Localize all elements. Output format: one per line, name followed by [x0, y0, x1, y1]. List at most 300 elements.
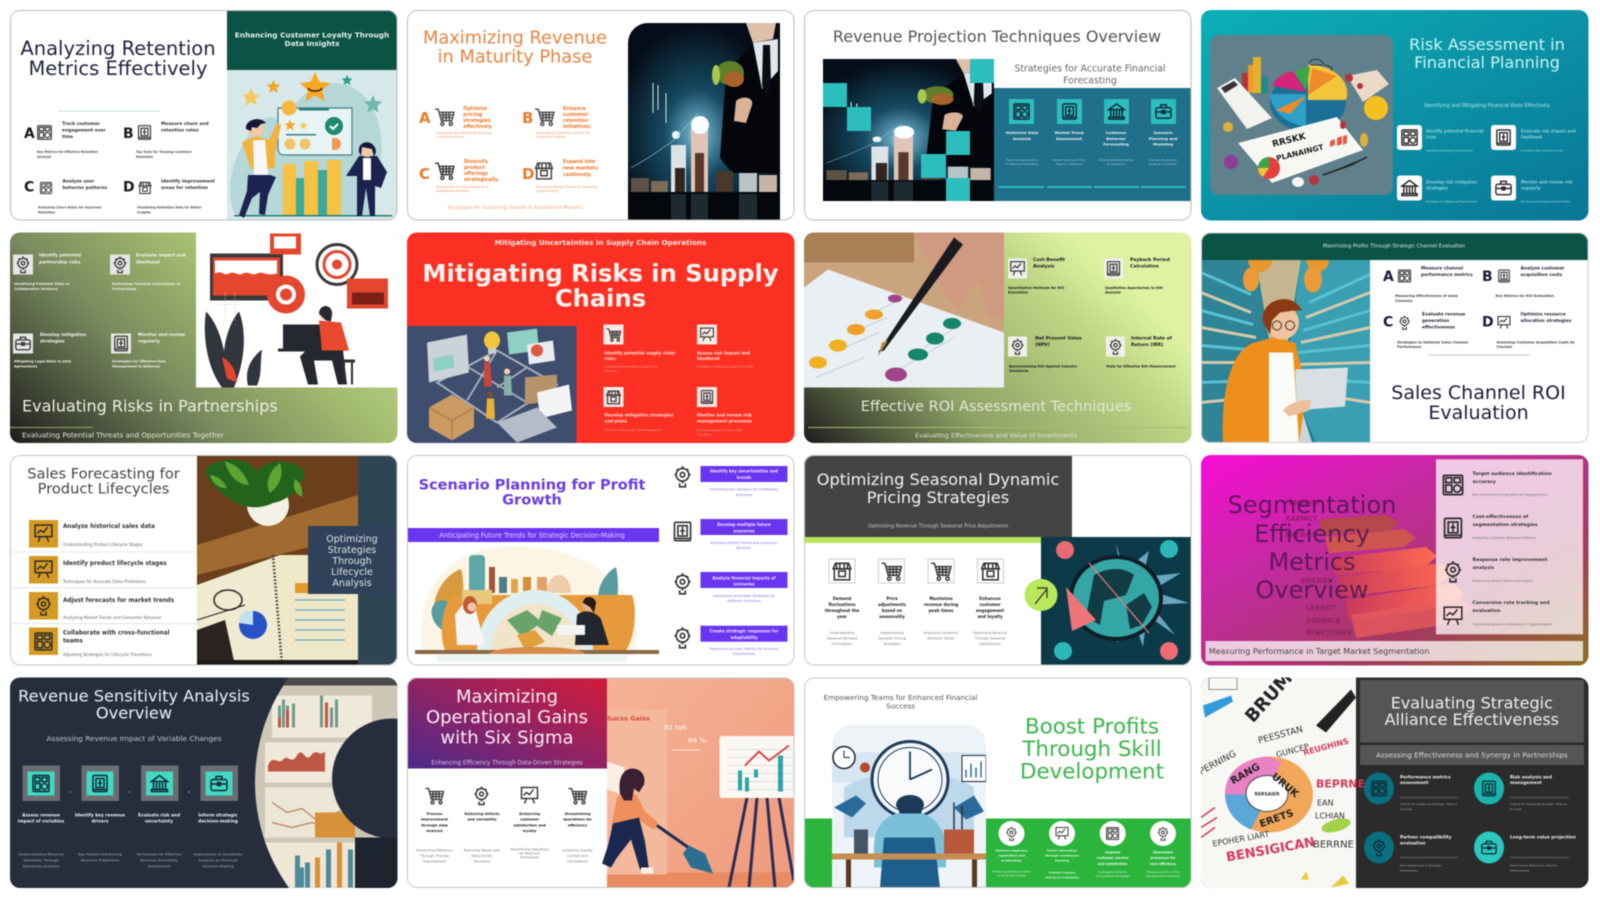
- column 2: [878, 559, 907, 646]
- item 2: Payback Period: [1130, 257, 1170, 263]
- item 1: Identifying Potential Risks in: [14, 282, 70, 286]
- step 4: adaptability: [730, 635, 758, 640]
- slide: Maximizing Operational Gains with Six Sigma: [407, 678, 796, 888]
- title: Revenue Projection Techniques Overview: [833, 27, 1161, 46]
- item A: Optimize: [463, 106, 488, 112]
- step 4: Create strategic responses for: [710, 629, 778, 634]
- subtitle band: Anticipating Future Trends for Strategic Decision-Making: [439, 532, 625, 540]
- column 1: for Revenue Forecasting: [1006, 162, 1039, 166]
- metric 3: Measuring Market Reach and Impact: [1472, 579, 1534, 583]
- item 2: Strategies for Mitigating Supply Chain Risks: [697, 364, 755, 368]
- column 2: Impact on Revenue: [1056, 162, 1082, 166]
- step 3: [674, 572, 788, 603]
- item 2: Assess risk impact and: [697, 350, 750, 356]
- overlay panel: Analysis: [332, 578, 372, 589]
- item 4: [1491, 176, 1573, 204]
- item C: Performance: [1397, 345, 1422, 349]
- column 4: Planning and: [1149, 136, 1178, 141]
- item 4: [1106, 336, 1176, 368]
- item A: Analysis: [37, 155, 52, 159]
- item A: Key Metrics for Effective Retention: [37, 150, 98, 154]
- title: Metrics Effectively: [28, 57, 208, 80]
- metric 3: Response rate improvement: [1472, 557, 1548, 563]
- column 2: Foster innovation: [1047, 848, 1077, 852]
- illustration: man with laptop in aisle: [1201, 260, 1370, 443]
- item A: Channels: [1395, 299, 1412, 303]
- illustration: hand-drawn mind map: ERETS: [1258, 808, 1295, 830]
- column 4: Achieving Quality: [562, 848, 593, 852]
- item A: [24, 121, 106, 159]
- item C: Established Markets: [436, 189, 469, 193]
- item B: B: [522, 109, 533, 127]
- step 2: Behavior: [736, 546, 752, 550]
- illustration: analysts around a dial: [415, 547, 659, 662]
- item A: performance metrics: [1421, 272, 1473, 278]
- illustration: woman pushing a spade: 01 tak: [664, 724, 688, 732]
- column 4: [1141, 99, 1186, 188]
- illustration: isometric supply chain: [407, 326, 576, 443]
- column 1: Fluctuations: [832, 642, 853, 646]
- step 2: Key Factors Influencing: [78, 852, 123, 856]
- title: Effective ROI Assessment Techniques: [861, 399, 1131, 415]
- item A: strategies: [463, 118, 491, 124]
- row 1: Understanding Product Lifecycle Stages: [63, 542, 143, 547]
- step 2: Identify key revenue: [75, 812, 125, 818]
- step 3: scenarios: [733, 582, 755, 587]
- item 4: Strategies for Effective Risk: [112, 360, 166, 364]
- column 2: Dynamic Pricing: [878, 636, 906, 640]
- column 3: loyalty: [523, 829, 537, 833]
- item D: D: [123, 180, 135, 196]
- row 3: Adjust forecasts for market trends: [63, 598, 175, 604]
- step 4: Measuring Success: Metrics for Scenario: [710, 647, 778, 651]
- column 1: Analysis: [1013, 136, 1032, 141]
- column 4: [973, 559, 1007, 646]
- item D: Optimize resource: [1520, 312, 1566, 318]
- illustration: hand-drawn mind map: BEPRNE: [1316, 778, 1365, 790]
- step 4: Inform strategic: [198, 812, 238, 818]
- item A: in Maturity Phase: [436, 135, 465, 139]
- item 3: Develop mitigation: [40, 332, 86, 338]
- item 2: likelihood: [697, 356, 720, 361]
- header panel: [227, 10, 398, 70]
- subtitle panel: Assessing Effectiveness and Synergy in Partnerships: [1376, 750, 1568, 760]
- column 1: fluctuations: [829, 602, 856, 607]
- item D: [1482, 312, 1576, 349]
- column 1: Enhancing Employee Skills: [992, 870, 1031, 874]
- column 3: Utilizing Statistical Models: [1098, 158, 1134, 162]
- row 1: [29, 520, 155, 548]
- column 1: Improvement: [423, 860, 447, 864]
- item 1: Criteria for Assessing Strategic Alliance: [1400, 802, 1457, 806]
- row 1: Analyze historical sales data: [63, 524, 155, 530]
- illustration: hand-drawn mind map: EAN: [1317, 798, 1334, 808]
- item C: strategically.: [464, 177, 499, 183]
- item A: pricing: [463, 112, 483, 118]
- illustration: rising red steps: SOUBICE: [1306, 617, 1341, 625]
- illustration: risk planning desk: PLANAINGT: [1275, 142, 1325, 163]
- header panel: Optimizing Revenue Through Seasonal Price Adjustments: [868, 524, 1009, 530]
- title panel: Evaluating Strategic: [1391, 694, 1553, 712]
- metric 1: Target audience identification: [1472, 471, 1552, 477]
- item 2: [1491, 125, 1576, 152]
- title: Efficiency: [1254, 520, 1370, 548]
- item B: Continued Growth: [536, 135, 566, 139]
- row 3: [29, 592, 175, 620]
- item A: Measure channel: [1421, 266, 1464, 272]
- column 4: efficiency: [568, 824, 588, 828]
- item A: [1383, 266, 1473, 303]
- title: Financial Planning: [1414, 53, 1560, 72]
- item A: Track customer: [62, 121, 101, 127]
- item 3: [1397, 176, 1478, 204]
- title: Scenario Planning for Profit: [419, 477, 645, 493]
- step 3: uncertainty: [145, 818, 173, 824]
- slide: Evaluating Strategic Alliance Effectiveness: [1198, 657, 1588, 888]
- item D: Insights: [137, 210, 151, 214]
- item C: Innovations to Drive Revenue in: [436, 185, 489, 189]
- column 1: analysis: [426, 829, 443, 833]
- step 4: decision-making: [198, 818, 238, 824]
- column 4: Adjustments: [979, 642, 1001, 646]
- item D: Analyzing Customer Acquisition Costs by: [1496, 340, 1576, 344]
- column 3: revenue during: [924, 602, 958, 607]
- item 1: [604, 324, 675, 373]
- slide: Evaluating Risks in Partnerships: [10, 232, 398, 443]
- item 4: Tools for Effective ROI Measurement: [1106, 364, 1176, 368]
- item D: areas for retention: [161, 185, 208, 191]
- item 1: [1364, 772, 1458, 811]
- item 1: Success: [1400, 807, 1412, 811]
- item 4: Long-term value projection: [1510, 834, 1576, 840]
- title: Overview: [1256, 576, 1368, 604]
- column 1: through data: [421, 824, 448, 828]
- title panel: [1360, 680, 1584, 742]
- column 4: Control and: [567, 854, 588, 858]
- item 2: Success: [1510, 807, 1522, 811]
- column 3: and satisfaction: [1098, 862, 1128, 866]
- illustration: woman pushing a spade: 09 %: [688, 736, 706, 744]
- header panel: Maximizing: [456, 686, 558, 708]
- item 2: [110, 252, 186, 291]
- item B: acquisition costs: [1520, 272, 1563, 278]
- column 2: Price: [886, 596, 898, 601]
- item A: A: [24, 126, 35, 142]
- subheading: Strategies for Accurate Financial: [1014, 64, 1166, 75]
- green band: [804, 818, 1192, 888]
- column 1: for Business Growth: [997, 874, 1026, 878]
- step 3: [135, 766, 182, 868]
- column 3: Analyzing Consumer: [924, 631, 959, 635]
- slide: Mitigating Risks in Supply Chains: [407, 232, 794, 443]
- item 2: Criteria for Assessing Strategic Alliance: [1510, 802, 1567, 806]
- title: Risk Assessment in: [1409, 35, 1565, 54]
- column 2: [464, 786, 500, 864]
- item C: [24, 178, 107, 214]
- illustration: rising red steps: RAEMCT: [1285, 515, 1318, 523]
- overlay panel: Through: [331, 556, 372, 567]
- step 1: Scenarios: [736, 493, 752, 497]
- slide: Maximizing Revenue in Maturity Phase: [407, 10, 794, 221]
- column 4: Measuring ROI on Skill: [1147, 870, 1179, 874]
- column 3: satisfaction and: [513, 824, 546, 828]
- column 2: Reducing defects: [464, 812, 500, 816]
- illustration: woman pushing a spade: [602, 678, 796, 888]
- item 4: Monitor and review: [138, 332, 185, 338]
- item D: [123, 178, 215, 214]
- item 3: (NPV): [1035, 342, 1050, 348]
- slide: Sales Channel ROI Evaluation: [1201, 232, 1588, 443]
- item D: allocation strategies: [1520, 318, 1572, 324]
- item B: Enhance: [563, 106, 587, 112]
- column 4: Scenario Planning for: [1149, 158, 1178, 162]
- subtitle: Success: [886, 702, 915, 710]
- item C: Analyzing Churn Rates for Improved: [38, 206, 101, 210]
- illustration: hand-drawn mind map: [1198, 657, 1365, 888]
- column 3: Behavior: [1106, 136, 1126, 141]
- column 4: Development Initiatives: [1146, 874, 1181, 878]
- column 1: Through Process: [419, 854, 449, 858]
- photo: plant and notebook on desk: [197, 455, 398, 666]
- illustration: customers rating a dashboard: [227, 70, 398, 221]
- column 1: Process: [427, 812, 442, 816]
- step 1: impact of variables: [18, 818, 65, 824]
- column 1: [825, 559, 859, 646]
- item 3: Partner compatibility: [1400, 834, 1452, 840]
- illustration: hand-drawn mind map: REUGHINS: [1302, 737, 1350, 757]
- overlay panel: [308, 526, 398, 594]
- slide: Scenario Planning for Profit Growth: [407, 455, 794, 666]
- item A: A: [419, 109, 431, 127]
- metric 4: evaluation: [1472, 608, 1500, 614]
- item 1: [1397, 125, 1483, 152]
- column 3: Improve: [1105, 850, 1121, 854]
- item 4: management processes: [697, 418, 752, 424]
- column 2: That Drive Profitability: [1045, 876, 1079, 880]
- column 1: productivity: [1001, 858, 1022, 862]
- subtitle: Assessing Revenue Impact of Variable Changes: [46, 734, 222, 743]
- step 3: Different Outcomes: [727, 599, 761, 603]
- item B: customer: [563, 112, 589, 118]
- header panel: Enhancing Efficiency Through Data-Driven Strategies: [431, 760, 583, 766]
- item B: [1482, 266, 1565, 298]
- slide: Segmentation Efficiency Metrics Overview: [1201, 455, 1588, 666]
- column 4: and loyalty: [977, 614, 1003, 619]
- item A: A: [1383, 269, 1394, 285]
- column 4: Streamlining: [564, 812, 591, 816]
- column 4: Modeling: [1153, 142, 1173, 146]
- item 3: Net Present Value: [1035, 336, 1082, 342]
- item D: cautiously.: [563, 172, 592, 178]
- item D: Identify improvement: [161, 178, 215, 184]
- metric 4: Optimizing Resource Allocation in Segmentation: [1472, 622, 1552, 626]
- illustration: rising red steps: ENERGY: [1289, 499, 1321, 507]
- item C: C: [1383, 314, 1393, 330]
- item B: B: [1482, 269, 1493, 285]
- column 3: Leveraging Skills for: [1098, 870, 1128, 874]
- title: Mitigating Risks in Supply: [422, 260, 779, 288]
- column 3: Productivity: [520, 856, 539, 860]
- item C: behavior patterns: [62, 185, 107, 191]
- illustration: person facing a big clock: [832, 724, 986, 888]
- column 3: [1096, 821, 1130, 878]
- illustration: woman analysing risk dashboards: [196, 232, 398, 388]
- item 2: Evaluate impact and: [136, 252, 186, 258]
- step 1: Identifying Key Variables for Profitability: [710, 488, 778, 492]
- column 3: Forecasting: [1103, 142, 1129, 146]
- overlay panel: Lifecycle: [331, 567, 373, 578]
- column 1: Enhance employee: [996, 848, 1027, 852]
- step 2: Analyzing Market Trends and Consumer: [710, 541, 778, 545]
- title: Through Skill: [1021, 737, 1162, 762]
- item C: generation: [1422, 318, 1449, 324]
- step 4: Decision-Making: [202, 864, 234, 868]
- step 4: Effectiveness: [733, 652, 756, 656]
- image: charts wall in lens shape: [250, 678, 452, 888]
- item 4: regularly: [1521, 186, 1541, 192]
- header panel: [804, 455, 1072, 537]
- step 1: [674, 466, 788, 497]
- column 2: Assessment: [1056, 136, 1082, 141]
- title: Analyzing Retention: [20, 37, 216, 60]
- column 1: Seasonal Demand: [827, 636, 857, 640]
- item 2: Partnerships: [112, 287, 136, 291]
- item 3: Develop risk mitigation: [1426, 180, 1477, 186]
- row 4: teams: [63, 638, 83, 644]
- footer text: Strategies for Sustaining Growth in Established Markets: [447, 205, 583, 211]
- item 2: [1104, 257, 1170, 294]
- illustration: rising red steps: ENERGY: [1301, 577, 1333, 585]
- slide: Risk Assessment in Financial Planning: [1201, 10, 1588, 220]
- illustration: woman pushing a spade: Sucss Gaiss: [607, 714, 650, 722]
- header panel: Optimizing Seasonal Dynamic: [817, 470, 1059, 489]
- column 2: learning: [1055, 858, 1069, 862]
- step 1: Variability Through: [23, 858, 60, 862]
- column 1: year: [837, 614, 847, 619]
- item 3: [604, 387, 674, 432]
- column 2: Data-Driven: [471, 854, 493, 858]
- column 4: Consistency: [567, 860, 588, 864]
- item 3: Risk Assessment in Strategic: [1400, 864, 1442, 868]
- column 3: Streamlining Operations: [510, 848, 549, 852]
- item 2: Calculation: [1130, 264, 1159, 270]
- item 2: Evaluate risk impact and: [1521, 128, 1576, 134]
- item C: Analyze user: [62, 178, 95, 184]
- item 1: risks: [604, 356, 616, 361]
- item C: [419, 159, 499, 193]
- item 4: Operations: [697, 432, 712, 436]
- step 3: Analyze financial impacts of: [712, 575, 776, 580]
- item 1: [13, 252, 82, 291]
- step 2: Revenue Projections: [81, 858, 119, 862]
- illustration: hand-drawn mind map: GUNCEP: [1275, 742, 1310, 759]
- title: Growth: [502, 492, 562, 508]
- step 2: scenarios: [733, 528, 755, 533]
- title: Maximizing Revenue: [423, 27, 607, 48]
- item 1: Identifying Emerging Financial Risks: [1426, 148, 1473, 152]
- metric 3: [1445, 557, 1548, 583]
- item 3: [13, 332, 86, 368]
- item 1: partnership risks: [39, 260, 81, 266]
- item C: [1383, 312, 1468, 349]
- step 3: Revenue Sensitivity: [140, 858, 179, 862]
- step 2: Develop multiple future: [717, 522, 771, 527]
- illustration: hand-drawn mind map: BERRNE: [1313, 840, 1354, 850]
- illustration: rising red steps: [1285, 499, 1471, 638]
- footer bar: Measuring Performance in Target Market Segmentation: [1209, 647, 1430, 656]
- step 2: [674, 519, 788, 550]
- step 1: Sensitivity Analysis: [23, 864, 59, 868]
- item 2: Risk analysis and: [1510, 774, 1552, 780]
- item C: Evaluate revenue: [1422, 312, 1465, 318]
- header panel: with Six Sigma: [440, 728, 574, 748]
- column 1: Historical Data: [1006, 130, 1039, 135]
- item 2: [1474, 772, 1569, 811]
- column 2: Reducing Waste with: [464, 848, 500, 852]
- illustration: hand-drawn mind map: PEESSTAN: [1257, 725, 1304, 746]
- illustration: risk planning desk: RRSKK: [1271, 132, 1308, 150]
- step 4: Implications of Sensitivity: [194, 852, 243, 856]
- slide: Optimizing Seasonal Dynamic Pricing Strategies: [804, 455, 1192, 666]
- item 2: Analysis: [1105, 290, 1121, 294]
- item 1: Collaborative Ventures: [14, 287, 58, 291]
- footer bar: [1206, 641, 1583, 661]
- header panel: Pricing Strategies: [867, 488, 1009, 507]
- row 2: [29, 556, 167, 584]
- title: Revenue Sensitivity Analysis: [18, 686, 250, 706]
- item 3: Agreements: [14, 364, 37, 368]
- slide: Sales Forecasting for Product Lifecycles: [10, 455, 398, 666]
- item 1: Performance metrics: [1400, 774, 1451, 780]
- item C: Retention: [38, 210, 55, 214]
- title: Segmentation: [1228, 491, 1396, 519]
- item 4: regularly: [138, 338, 160, 344]
- column 2: adjustments: [878, 602, 907, 607]
- illustration: rising red steps: EFBCSTANS: [1306, 629, 1352, 637]
- step 3: Techniques for Effective: [135, 852, 182, 856]
- item A: engagement over: [62, 128, 106, 134]
- item 1: Identify potential supply chain: [604, 350, 675, 356]
- item 3: Partnerships: [1400, 868, 1418, 872]
- header band: [1201, 232, 1588, 260]
- item B: initiatives.: [563, 124, 592, 130]
- column 4: Scenario: [1153, 130, 1173, 135]
- column 4: [1146, 821, 1181, 878]
- item 1: Cost-Benefit: [1033, 257, 1066, 263]
- header panel: [407, 678, 607, 768]
- top subtitle: Mitigating Uncertainties in Supply Chain Operations: [495, 238, 706, 247]
- item 3: evaluation: [1400, 840, 1426, 846]
- step 1: [18, 766, 65, 868]
- item C: offerings: [464, 171, 488, 177]
- item A: Measuring Effectiveness of Sales: [1395, 294, 1458, 298]
- item C: product: [464, 165, 486, 171]
- column 1: Historical Data Analysis: [1006, 158, 1038, 162]
- item 1: assessment: [1400, 780, 1429, 786]
- item D: new markets: [563, 166, 598, 172]
- column 1: improvement: [421, 818, 448, 822]
- column 2: Training Programs: [1049, 870, 1076, 874]
- illustration: hand-drawn mind map: BENSIGICAN: [1225, 835, 1316, 865]
- title: Sales Channel ROI: [1391, 382, 1566, 404]
- item 1: Evaluation: [1008, 290, 1029, 294]
- illustration: hand-drawn mind map: URUK: [1269, 771, 1301, 801]
- item B: Measure churn and: [161, 121, 209, 127]
- column 2: Implementing: [880, 631, 904, 635]
- item B: [123, 121, 209, 159]
- column 2: through continuous: [1045, 854, 1079, 858]
- item 2: likelihood: [1521, 134, 1542, 140]
